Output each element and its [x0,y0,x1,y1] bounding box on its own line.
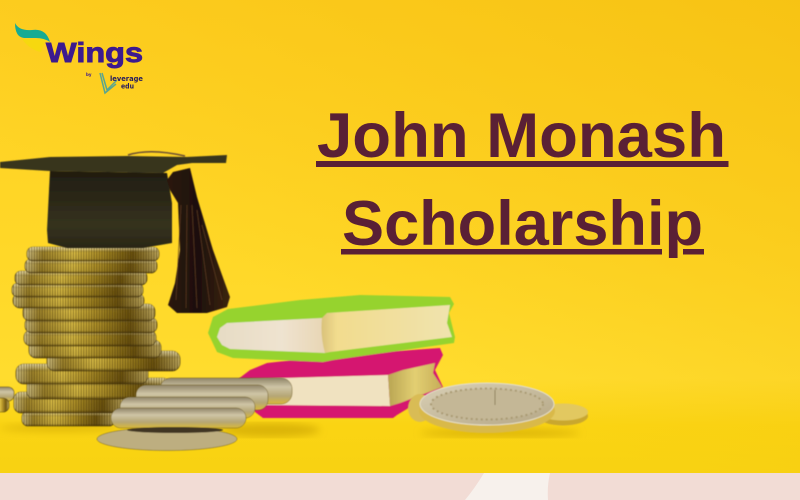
logo: Wings by leverage edu [15,23,143,93]
books [208,295,455,418]
cap board [0,155,227,173]
title [316,101,728,259]
logo byline: by [86,72,92,77]
cap body [47,171,172,248]
bottom pale strip [0,473,800,500]
coin stack [0,247,180,426]
floor shadows [0,423,580,437]
logo: Wings by leverage edu: edu [121,82,134,90]
coins [12,247,180,426]
logo leverage edu mark [100,73,117,93]
title line one: John Monash [317,101,726,171]
green book [208,295,455,362]
cap string [128,152,185,156]
coin edge ridges [12,247,180,426]
left edge coin [0,387,14,412]
title line two: Scholarship [342,189,703,259]
logo swoosh [15,23,50,52]
graduation cap [0,152,230,313]
front coins [97,378,292,450]
small back coins [408,394,588,426]
logo leverage edu text: leverage [110,75,143,83]
pink book [237,348,443,418]
tassel [167,168,230,313]
large coin [419,383,555,433]
logo wordmark: Wings [46,37,143,68]
coins on the right [408,383,588,433]
